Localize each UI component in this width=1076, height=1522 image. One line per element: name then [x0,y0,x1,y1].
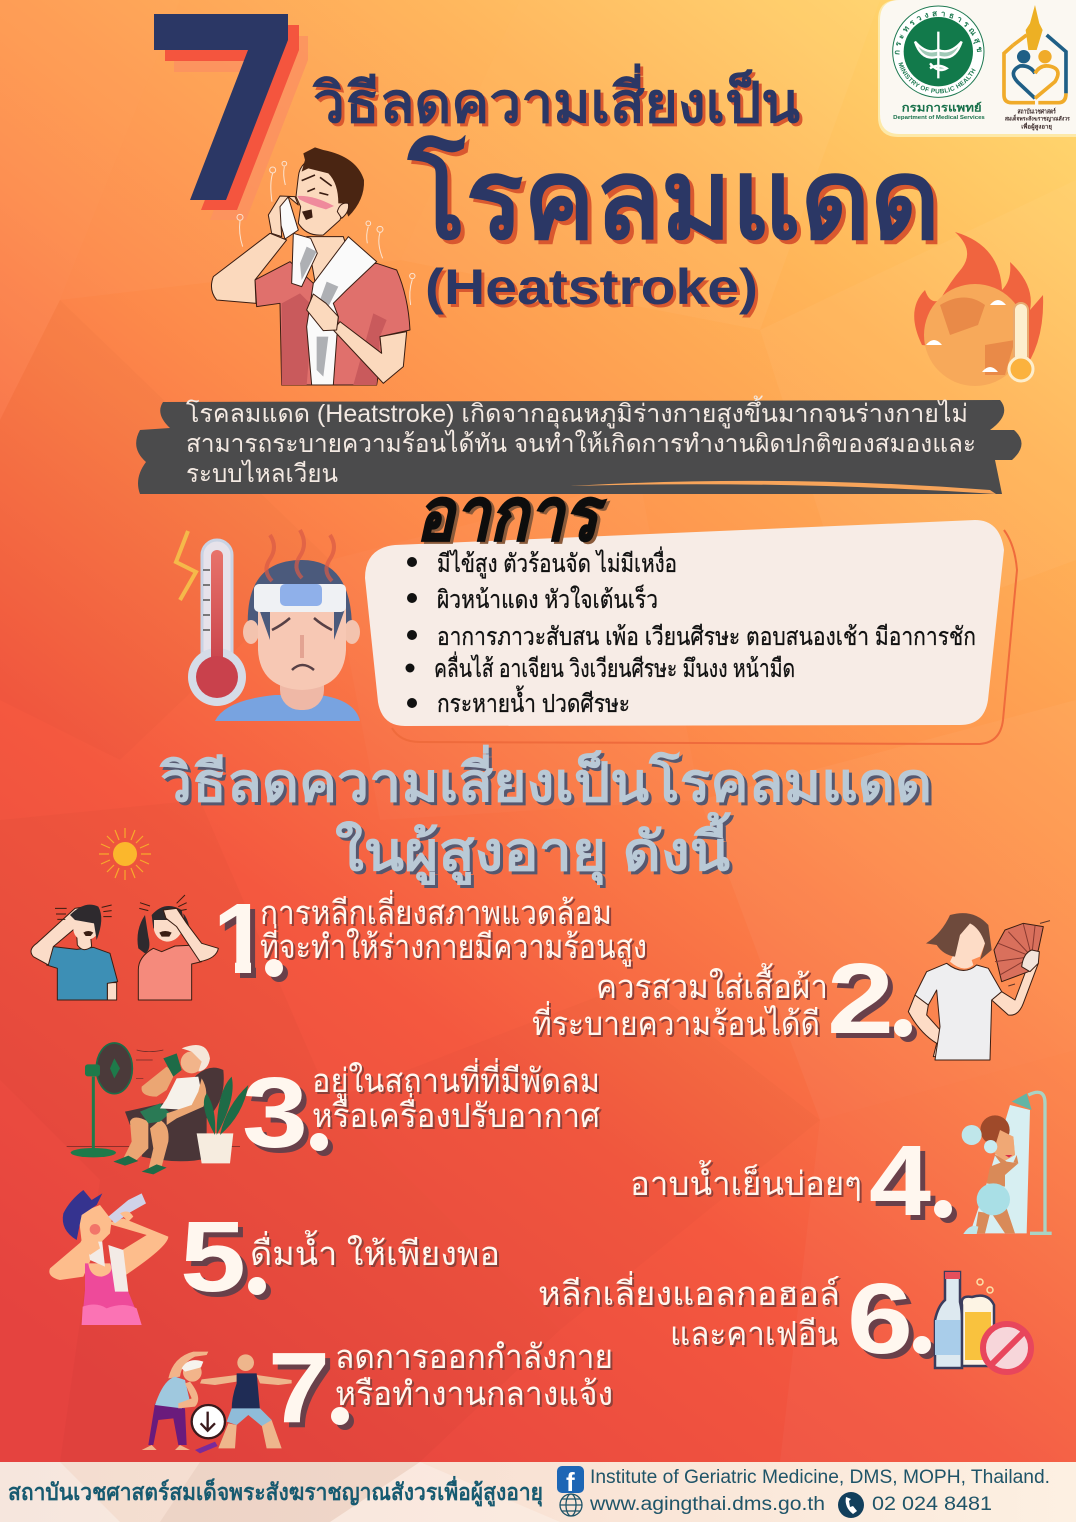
step 7: 7 [268,1332,330,1444]
step 6 [538,1263,931,1375]
step 3 [242,1057,600,1169]
icon: down arrow badge [192,1405,225,1438]
step 4 [630,1125,952,1237]
logo: Institute of Geriatric Medicine: สมเด็จพระสังฆราชญาณสังวร [1005,114,1071,123]
logo: Ministry of Public Health: Department of Medical Services [893,115,985,121]
illustration: elderly exercisers [142,1352,292,1453]
step 3: หรือเครื่องปรับอากาศ [312,1093,600,1134]
symptoms card outline [392,530,1017,744]
step 5: 5 [180,1201,246,1313]
title line 2: โรคลมแดด [407,135,940,262]
website: www.agingthai.dms.go.th [589,1494,825,1515]
step 1 [220,890,647,982]
description text: โรคลมแดด (Heatstroke) เกิดจากอุณหภูมิร่างกายสูงขึ้นมากจนร่างกายไม่ [186,395,968,429]
step 2: 2 [827,943,894,1055]
step 2: ที่ระบายความร้อนได้ดี [532,1001,820,1042]
logo: Institute of Geriatric Medicine: สถาบันเวชศาสตร์ [1017,107,1056,115]
illustration: burning globe with thermometer [914,232,1043,386]
logo: Ministry of Public Health: กระทรวงสาธารณสุข [894,11,982,55]
step 6: 6 [847,1263,913,1375]
section heading: ในผู้สูงอายุ ดังนี้ [335,812,731,886]
description text: ระบบไหลเวียน [186,459,338,488]
brush background [136,400,1022,494]
step 7 [268,1332,613,1444]
symptoms heading: อาการ [416,473,607,556]
footer institute name: สถาบันเวชศาสตร์สมเด็จพระสังฆราชญาณสังวรเพื่อผู้สูงอายุ [8,1475,543,1507]
symptoms card [365,520,1004,726]
icon: facebook: f [566,1467,575,1497]
icon: phone [838,1492,864,1518]
step 4: 4 [869,1125,931,1237]
description text [186,395,976,488]
section heading: วิธีลดความเสี่ยงเป็นโรคลมแดด [159,744,932,813]
fan [71,1043,132,1157]
symptom bullets: มีไข้สูง ตัวร้อนจัด ไม่มีเหงื่อ [437,546,677,579]
section heading [159,744,932,886]
facebook page name: Institute of Geriatric Medicine, DMS, MOPH, Thailand. [590,1467,1050,1488]
step 7: ลดการออกกำลังกาย [335,1338,613,1375]
illustration: potted plant [197,1077,248,1163]
step 1: การหลีกเลี่ยงสภาพแวดล้อม [260,890,612,931]
step 2: ควรสวมใส่เสื้อผ้า [596,963,828,1005]
description text: สามารถระบายความร้อนได้ทัน จนทำให้เกิดการทำงานผิดปกติของสมองและ [186,429,976,458]
illustration: elderly person with fan [67,1043,240,1174]
description band [136,395,1022,494]
illustration: person drinking water [49,1190,168,1325]
phone number: 02 024 8481 [872,1494,992,1515]
step 5 [180,1201,500,1313]
illustration: person showering [962,1092,1052,1234]
step 3: อยู่ในสถานที่ที่มีพัดลม [312,1058,600,1101]
symptom bullets: กระหายน้ำ ปวดศีรษะ [437,685,630,718]
title line 1: วิธีลดความเสี่ยงเป็น [312,63,800,134]
symptom bullets: ผิวหน้าแดง หัวใจเต้นเร็ว [437,584,658,614]
icon: sun [99,828,151,880]
illustration: woman with fan [908,913,1050,1060]
step 1: ที่จะทำให้ร่างกายมีความร้อนสูง [260,924,647,967]
logo: Ministry of Public Health: MINISTRY OF PUBLIC HEALTH [898,62,976,94]
illustration: thermometer [176,531,246,706]
step 6: หลีกเลี่ยงแอลกอฮอล์ [538,1271,840,1312]
step 3: 3 [242,1057,308,1169]
symptom bullets: อาการภาวะสับสน เพ้อ เวียนศีรษะ ตอบสนองเช้า มีอาการชัก [437,623,976,651]
title line 3: (Heatstroke) [425,259,758,315]
logo: Ministry of Public Health: กรมการแพทย์ [902,102,982,115]
logo: Institute of Geriatric Medicine: เพื่อผู้สูงอายุ [1021,121,1052,131]
illustration: sweating man with towel [211,147,415,385]
icon: facebook [557,1466,584,1497]
step 5: ดื่มน้ำ ให้เพียงพอ [250,1230,500,1272]
illustration: sick person with cold compress [215,530,360,721]
symptom bullets: คลื่นไส้ อาเจียน วิงเวียนศีรษะ มึนงง หน้ามืด [434,651,795,683]
illustration: alcohol and no sign [935,1272,1031,1372]
step 1: 1 [213,883,269,995]
symptom bullets [406,546,976,718]
step 2 [532,943,912,1055]
illustration: two stressed people [31,895,218,1000]
logo: Institute of Geriatric Medicine [1004,5,1071,131]
footer bar [0,1462,1076,1522]
step 4: อาบน้ำเย็นบ่อยๆ [630,1160,862,1202]
logo panel [878,0,1076,137]
logo: Ministry of Public Health [892,6,985,121]
big number 7 [154,14,308,220]
step 6: และคาเฟอีน [670,1315,838,1352]
icon: globe [560,1494,582,1516]
step 7: หรือทำงานกลางแจ้ง [335,1375,613,1412]
